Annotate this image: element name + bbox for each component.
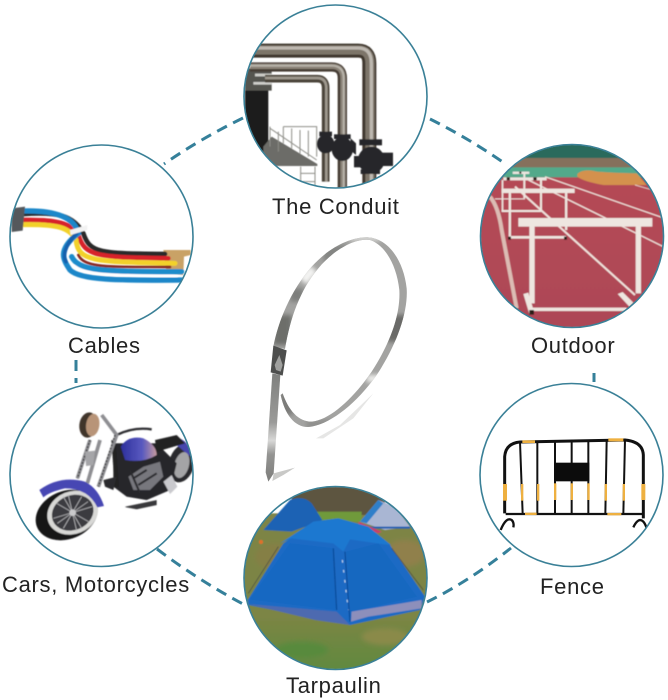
circle outline bbox=[10, 145, 193, 328]
photo: running track hurdles bbox=[481, 145, 663, 327]
label: Fence bbox=[540, 574, 605, 599]
photo: wire harness bbox=[12, 207, 191, 280]
circle outline bbox=[480, 384, 663, 566]
circle outline bbox=[244, 486, 427, 670]
circle outline bbox=[10, 384, 193, 566]
label: Cables bbox=[68, 333, 141, 358]
panel: Cables bbox=[10, 145, 193, 358]
tail shadow bbox=[272, 468, 295, 481]
photo: motorcycle bbox=[34, 412, 192, 542]
tail end bbox=[266, 373, 280, 482]
label: Outdoor bbox=[531, 333, 615, 358]
band loop bbox=[274, 237, 407, 427]
dashed connector ring bbox=[76, 118, 594, 604]
label: Cars, Motorcycles bbox=[2, 572, 190, 597]
label: Tarpaulin bbox=[286, 673, 382, 698]
panel: Cars, Motorcycles bbox=[2, 384, 199, 597]
panel: Outdoor bbox=[470, 143, 668, 358]
panel: The Conduit bbox=[244, 5, 427, 219]
buckle bbox=[271, 346, 287, 376]
central image: stainless steel cable tie bbox=[266, 233, 413, 482]
photo: pipes bbox=[245, 48, 393, 190]
hurdles bbox=[495, 172, 652, 314]
photo: blue tent on grass bbox=[244, 487, 426, 669]
panel: Fence bbox=[480, 384, 663, 599]
label: The Conduit bbox=[272, 194, 400, 219]
circle outline bbox=[480, 144, 664, 328]
photo: black and yellow barrier bbox=[501, 438, 647, 530]
circle outline bbox=[244, 5, 427, 188]
panel: Tarpaulin bbox=[235, 486, 435, 698]
